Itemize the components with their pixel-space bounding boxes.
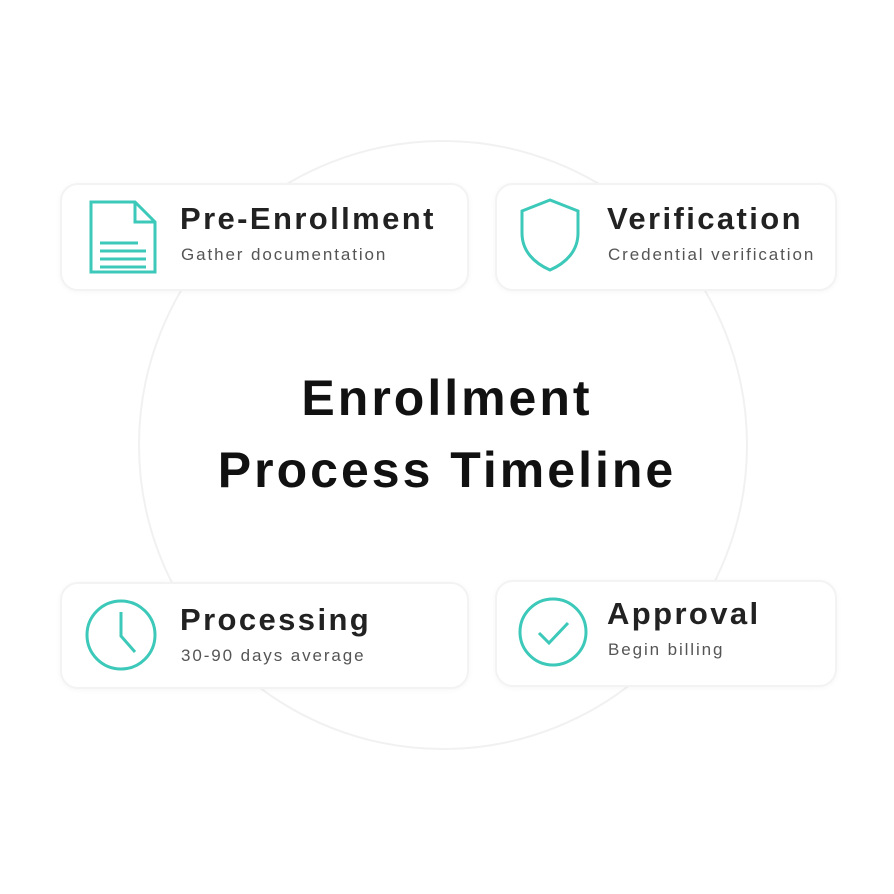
card: Verification: Verification <box>607 201 803 236</box>
icon: clock <box>86 600 156 670</box>
card: Pre-Enrollment <box>60 183 469 291</box>
card: Processing: Processing <box>180 602 371 637</box>
title: Process Timeline <box>218 442 676 498</box>
card: Approval: Begin billing <box>608 640 724 659</box>
background circle <box>138 140 748 750</box>
card: Processing <box>60 582 469 689</box>
title <box>218 370 676 498</box>
card: Pre-Enrollment: Gather documentation <box>181 245 387 264</box>
icon: document <box>90 200 156 274</box>
card: Approval: Approval <box>607 596 761 631</box>
card: Pre-Enrollment: Pre-Enrollment <box>180 201 436 236</box>
icon: check circle <box>518 598 588 666</box>
card: Verification <box>495 183 837 291</box>
icon: shield <box>520 198 580 272</box>
card: Verification: Credential verification <box>608 245 815 264</box>
card: Approval <box>495 580 837 687</box>
card: Processing: 30-90 days average <box>181 646 365 665</box>
title: Enrollment <box>301 370 593 426</box>
